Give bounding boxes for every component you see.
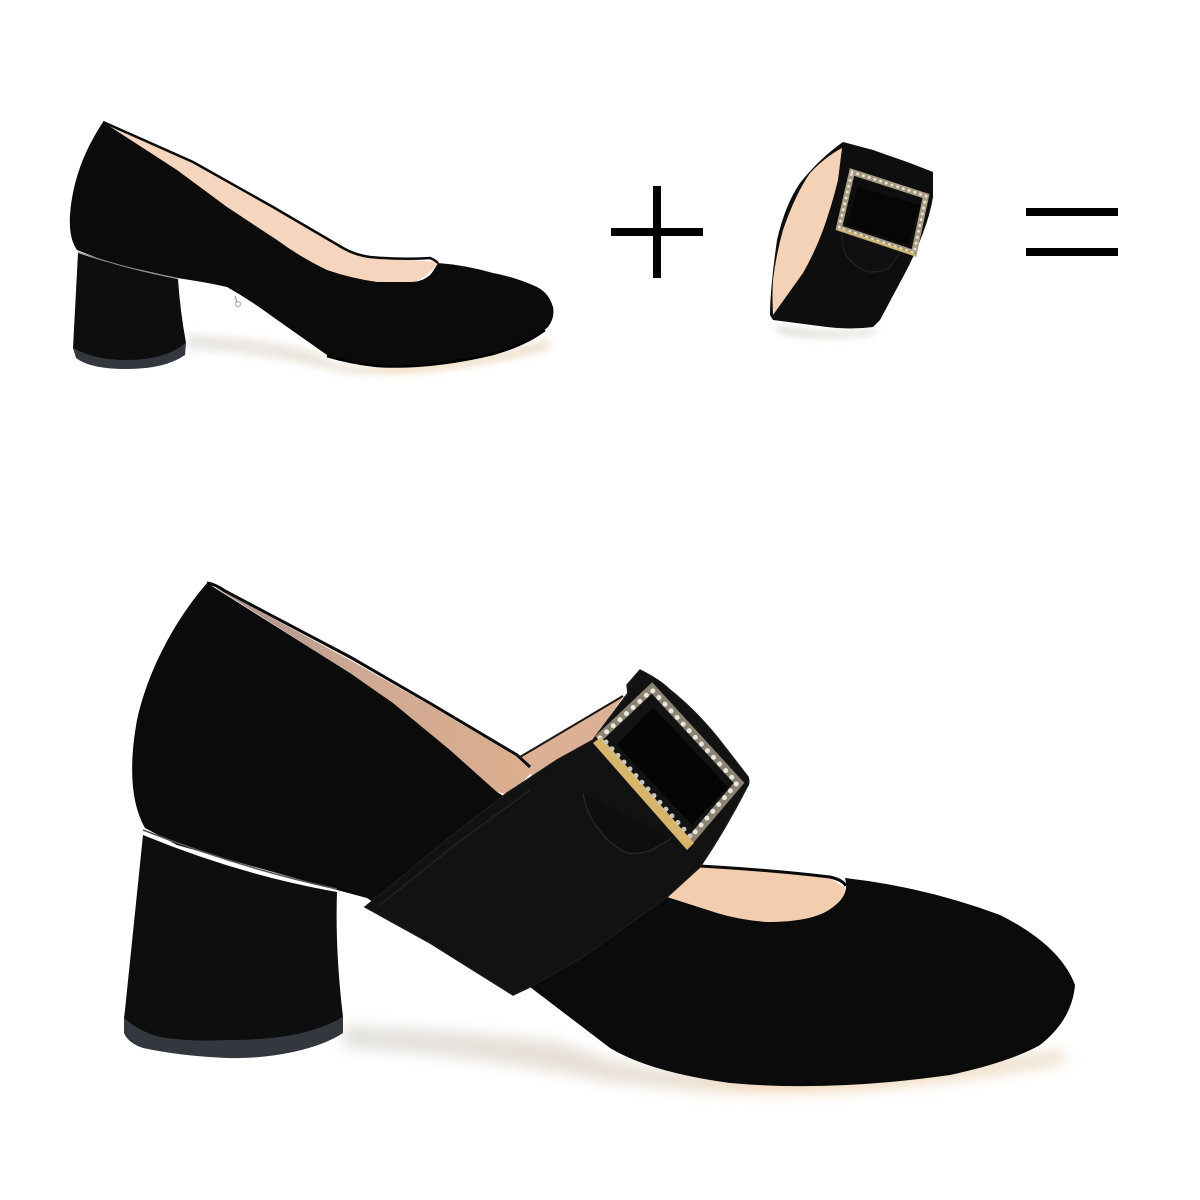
buckle opening [617,707,728,825]
buckle crystal frame [598,688,739,843]
back lining [213,586,532,795]
strap stitch line [380,790,530,905]
strap lining edge [520,696,623,757]
lining [105,123,438,284]
upper [70,122,553,366]
ground shadow [343,1025,1066,1091]
small pump shoe [70,122,553,374]
heel seam [78,252,177,278]
strap lining [772,148,842,315]
vamp rim [700,866,846,886]
buckle crystals [600,690,737,838]
heel tip [73,343,186,369]
collar line [103,122,438,263]
ground shadow [187,334,550,374]
plus sign [611,186,703,278]
front lining [664,866,845,922]
strap band [365,670,749,995]
detachable strap [770,142,933,337]
crystals on gold bar [606,742,690,836]
buckle gold bar [593,737,694,850]
strap shadow [775,326,880,337]
large combined shoe [124,583,1075,1091]
pull tab [235,296,240,306]
strap outer [770,142,933,328]
buckle [593,688,739,850]
heel [124,835,343,1042]
upper [132,583,1075,1086]
heel seam [143,830,337,889]
buckle [838,172,926,255]
heel tip [124,1017,343,1058]
strap tab [842,233,900,272]
strap tab [583,793,672,853]
lining behind strap [520,697,623,776]
heel [73,253,186,361]
sole edge [327,330,545,366]
equals sign [1026,208,1118,256]
collar line [207,583,530,767]
